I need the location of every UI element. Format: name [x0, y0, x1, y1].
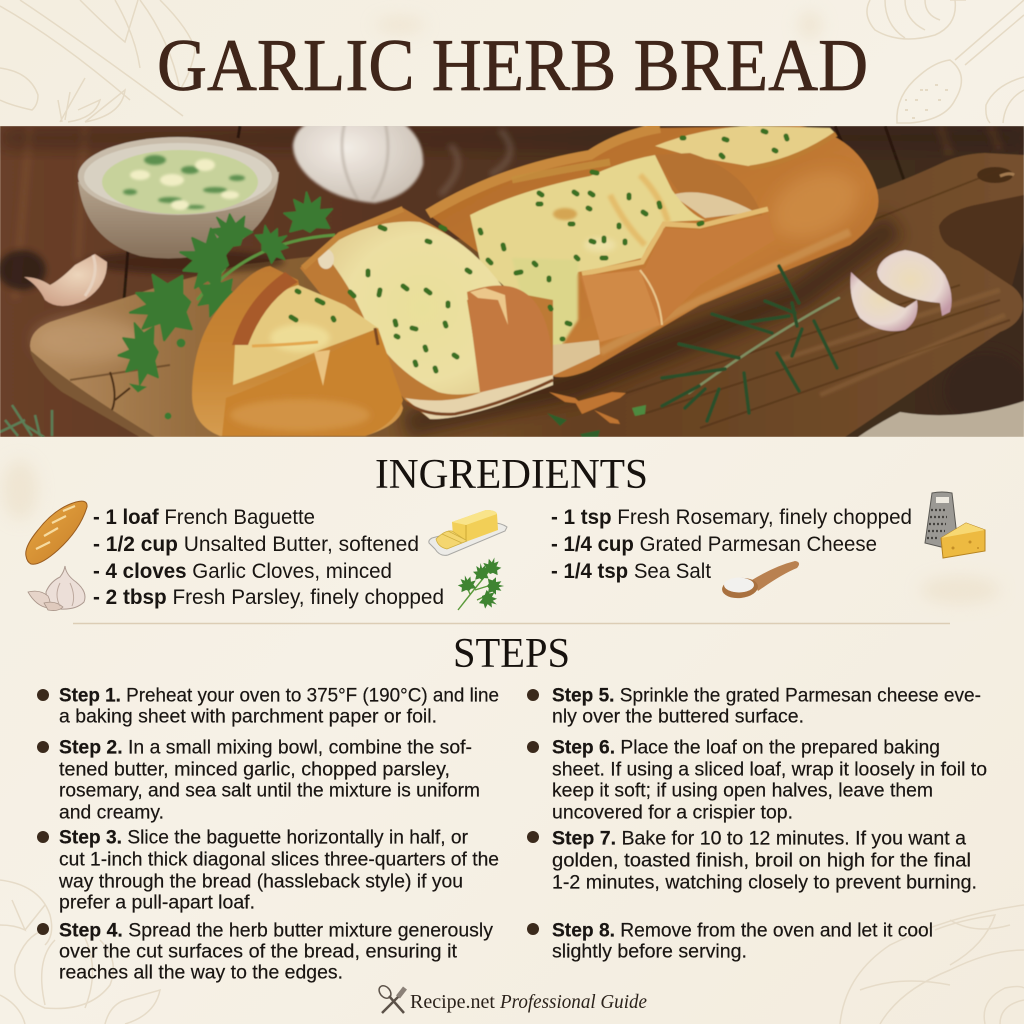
cut crumb — [552, 340, 600, 376]
ingredients list: right column — [551, 505, 912, 583]
step 3 — [37, 828, 499, 914]
herb specks — [291, 131, 787, 371]
icon: garlic — [28, 566, 85, 611]
rosemary sprig — [662, 266, 839, 421]
heading: steps: STEPS — [453, 631, 570, 677]
icon: whisk and spatula — [377, 983, 405, 1013]
step 8: Step 8. Remove from the oven and let it cool — [552, 920, 933, 942]
ingredients list: left column: - 2 tbsp Fresh Parsley, finely chopped — [93, 585, 444, 609]
flap — [682, 152, 761, 216]
footer text: Professional Guide — [499, 991, 647, 1013]
baguette front slice — [192, 266, 403, 436]
steps: right column — [527, 686, 987, 962]
step 2: rosemary, and sea salt until the mixture is uniform — [59, 780, 480, 802]
cutting board — [30, 153, 1024, 437]
step 2: and creamy. — [59, 802, 164, 824]
step 1: Step 1. Preheat your oven to 375°F (190°C) and line — [59, 686, 499, 706]
decorative sketches: bottom corners — [0, 880, 1024, 1024]
steps: left column — [37, 686, 499, 984]
step 8: slightly before serving. — [552, 942, 747, 962]
step 8 — [527, 920, 933, 962]
main cheese — [470, 155, 705, 345]
icon: grater and cheese — [925, 492, 985, 558]
garlic clove left — [24, 254, 107, 306]
baguette back section — [428, 126, 878, 377]
ingredients list: left column: - 1 loaf French Baguette — [93, 505, 315, 529]
step 6: uncovered for a crispier top. — [552, 802, 793, 824]
step 6: sheet. If using a sliced loaf, wrap it loosely in foil to — [552, 760, 987, 780]
steam — [440, 130, 510, 195]
icon: baguette — [26, 501, 87, 564]
crumbs — [547, 392, 646, 437]
step 3: Step 3. Slice the baguette horizontally in half, or — [59, 828, 469, 848]
step 3: way through the bread (hassleback style) if you — [58, 872, 463, 892]
divider — [73, 622, 950, 624]
ingredients list: left column: - 1/2 cup Unsalted Butter, softened — [93, 532, 419, 556]
table background — [0, 126, 1024, 437]
step 5: nly over the buttered surface. — [552, 706, 804, 728]
ingredients list: left column: - 4 cloves Garlic Cloves, minced — [93, 559, 392, 583]
step 4: over the cut surfaces of the bread, ensuring it — [59, 942, 458, 962]
garlic cloves right — [850, 250, 952, 331]
title: GARLIC HERB BREAD — [157, 25, 868, 107]
ingredients list: right column: - 1/4 cup Grated Parmesan Cheese — [551, 532, 877, 556]
footer text — [410, 991, 647, 1013]
paper stains — [2, 11, 1000, 604]
step 1: a baking sheet with parchment paper or foil. — [59, 706, 437, 728]
icon: butter — [429, 510, 507, 555]
step 3: prefer a pull-apart loaf. — [59, 892, 255, 914]
ingredients list: right column: - 1 tsp Fresh Rosemary, finely chopped — [551, 505, 912, 529]
step 1 — [37, 686, 499, 728]
decorative sketches: top corners — [0, 0, 1024, 123]
step 6: keep it soft; if using open halves, leave them — [552, 780, 933, 802]
step 2: tened butter, minced garlic, chopped parsley, — [59, 760, 450, 780]
icon: parsley — [456, 555, 504, 613]
step 5 — [527, 686, 981, 728]
footer text: Recipe.net — [410, 991, 495, 1013]
bowl of herb butter — [78, 137, 285, 274]
step 2: Step 2. In a small mixing bowl, combine the sof- — [59, 738, 472, 758]
ingredients list: right column: - 1/4 tsp Sea Salt — [551, 559, 711, 583]
step 6 — [527, 738, 987, 824]
step 3: cut 1-inch thick diagonal slices three-quarters of the — [59, 850, 499, 870]
rosemary bottom left — [0, 405, 52, 437]
step 7: Step 7. Bake for 10 to 12 minutes. If you want a — [552, 828, 966, 850]
garlic bulb background — [293, 118, 423, 203]
step 4 — [37, 920, 493, 984]
step 4: Step 4. Spread the herb butter mixture generously — [59, 920, 493, 942]
heading: ingredients: INGREDIENTS — [375, 452, 648, 498]
hero photo — [0, 118, 1024, 437]
step 7: golden, toasted finish, broil on high for the final — [552, 850, 971, 872]
step 7 — [527, 828, 977, 894]
ingredients list: left column — [93, 505, 444, 609]
icon: salt spoon — [721, 561, 799, 600]
step 6: Step 6. Place the loaf on the prepared baking — [552, 738, 940, 758]
front rim — [582, 209, 768, 274]
step 5: Step 5. Sprinkle the grated Parmesan cheese eve- — [552, 686, 981, 706]
linen cloth — [858, 401, 1024, 437]
parsley sprigs — [116, 190, 335, 419]
baguette middle slice — [300, 208, 553, 419]
herbed crumb — [512, 258, 578, 345]
step 4: reaches all the way to the edges. — [59, 962, 343, 984]
rear cheese — [655, 126, 836, 166]
step 7: 1-2 minutes, watching closely to prevent burning. — [552, 872, 977, 894]
step 2 — [37, 738, 480, 824]
